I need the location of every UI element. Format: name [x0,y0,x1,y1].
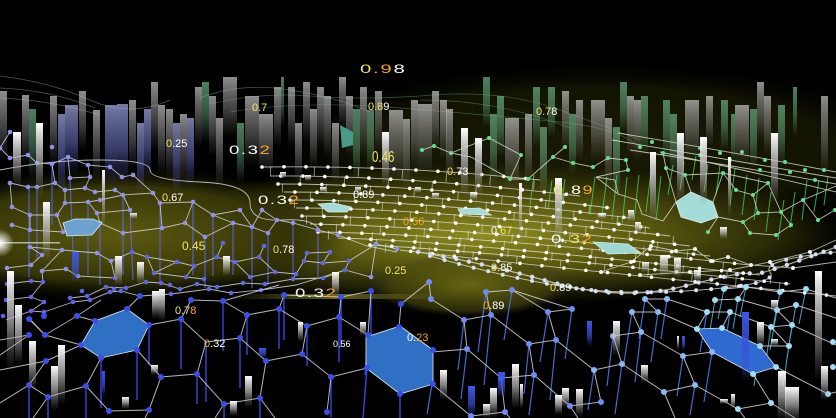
label 0.32: 0.32 [204,338,225,350]
label 0.78: 0.78 [175,305,196,317]
label 0.67: 0.67 [491,225,512,237]
lens flare: left edge [0,229,60,257]
label 0.32: 0.32 [551,233,593,246]
label 0.23: 0.23 [407,332,428,344]
label 0.67: 0.67 [162,192,183,204]
hexagon mesh: right green section [422,133,836,235]
hexagon mesh: left lavender section [0,132,397,340]
label 0.46: 0.46 [372,147,395,165]
label 0.89: 0.89 [368,101,389,113]
label 0.45: 0.45 [182,239,206,253]
label 0.78: 0.78 [273,244,294,256]
value labels: floating numbers [162,62,594,350]
label 0.89: 0.89 [353,189,374,201]
label 0.32: 0.32 [229,144,271,157]
foreground bar chart: short white and blue columns [7,123,828,418]
label 0.98: 0.98 [360,62,406,76]
label 0.78: 0.78 [536,106,557,118]
hexagon cells: highlighted filled hexagons [63,125,776,394]
hexagon mesh: centre rows of white nodes [262,167,836,296]
data streaks: green and blue falling lines [29,156,828,418]
back bar chart: rising columns [0,77,828,197]
label 0.89: 0.89 [483,300,504,312]
label 0.25: 0.25 [385,265,406,277]
distant wireframe net [0,76,640,148]
label 0.89: 0.89 [550,282,571,294]
hexagon mesh: foreground blue section [0,282,836,418]
label 0.7: 0.7 [252,102,267,114]
label 0.89: 0.89 [553,184,594,197]
label 0.56: 0.56 [403,216,424,228]
label 0.25: 0.25 [166,138,187,150]
label 0.56: 0.56 [333,339,351,349]
label 0.32: 0.32 [295,287,337,300]
label 0.85: 0.85 [491,262,512,274]
label 0.32: 0.32 [258,194,300,207]
label 0.73: 0.73 [447,166,468,178]
